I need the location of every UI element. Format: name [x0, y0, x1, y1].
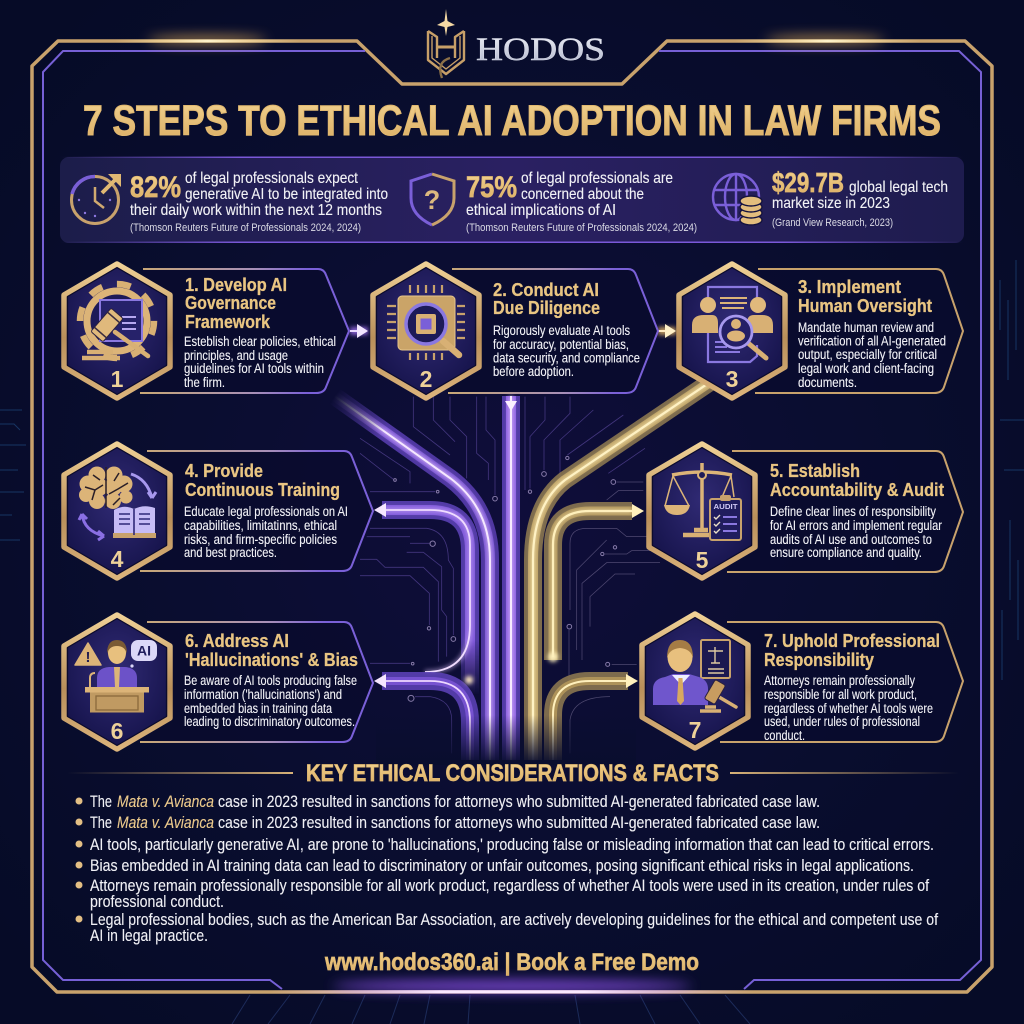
thin circuit traces: [360, 397, 660, 753]
description: capabilities, limitatinns, ethical: [184, 518, 337, 533]
icon badge: gear, document and gavel: [64, 264, 170, 398]
heading: 2. Conduct AI: [493, 279, 599, 300]
stat: 75%: concerned about the: [521, 186, 644, 203]
description: [770, 504, 942, 560]
description: before adoption.: [493, 364, 574, 379]
stat: $29.7B: market size in 2023: [772, 195, 890, 212]
description: [184, 334, 336, 390]
arrow: to step 7: [626, 674, 638, 688]
wordmark: HODOS: [476, 32, 605, 68]
key facts list: professional conduct.: [90, 892, 224, 911]
heading: 5. Establish: [770, 460, 860, 481]
stat: $29.7B: $29.7B: [772, 167, 844, 198]
stat: 75%: [466, 170, 697, 234]
icon: globe with coins: [713, 174, 762, 225]
icon badge: brain and book: 4: [111, 546, 124, 572]
logo crest: [428, 31, 464, 78]
description: used, under rules of professional: [764, 714, 920, 729]
logo star: [437, 9, 455, 36]
description: Esteblish clear policies, ethical: [184, 334, 336, 349]
heading: 1. Develop AI: [185, 274, 287, 295]
description: conduct.: [764, 728, 805, 743]
panel: step 5: [649, 444, 963, 578]
icon badge: speaker at podium: [64, 615, 170, 749]
description: Attorneys remain professionally: [764, 673, 915, 688]
icon: shield with question mark: ?: [424, 185, 440, 215]
panel: step 2: [373, 264, 658, 398]
panel outline: [140, 451, 373, 571]
stat: 75%: ethical implications of AI: [466, 202, 616, 219]
panel: statistics: [60, 156, 964, 243]
heading: [798, 276, 932, 316]
description: documents.: [798, 375, 857, 390]
arrow: step 1 to step 2: [350, 324, 368, 338]
description: for accuracy, potential bias,: [493, 337, 629, 352]
panel outline: [140, 269, 349, 393]
icon badge: brain and book: [64, 444, 170, 578]
description: Define clear lines of responsibility: [770, 504, 936, 519]
heading: [185, 274, 287, 332]
stat: $29.7B: [772, 167, 948, 229]
section heading: key considerations: KEY ETHICAL CONSIDERATIONS & FACTS: [306, 760, 719, 787]
icon: clock with arrow: [72, 174, 121, 224]
description: [764, 673, 933, 743]
key facts list: [76, 792, 938, 945]
description: Rigorously evaluate AI tools: [493, 323, 630, 338]
panel outline: [140, 622, 373, 742]
central circuit network: [333, 374, 722, 760]
description: [184, 504, 348, 560]
central vertical route from step 2: [505, 396, 517, 760]
description: data security, and compliance: [493, 350, 640, 366]
stat: 75%: of legal professionals are: [521, 170, 673, 187]
heading: [185, 460, 340, 500]
panel: step 4: [64, 444, 373, 578]
arrow: to step 4: [374, 503, 386, 517]
panel: step 7: [642, 614, 963, 748]
panel: step 3: [679, 264, 963, 398]
heading: [185, 630, 358, 670]
side data decoration: [0, 260, 1024, 680]
icon: shield with question mark: [411, 174, 454, 225]
icon badge: scales and audit clipboard: AUDIT: [714, 502, 738, 511]
stat: 82%: generative AI to be integrated into: [185, 186, 388, 203]
top right glow: [735, 36, 920, 44]
description: Mandate human review and: [798, 320, 934, 335]
call to action: www.hodos360.ai | Book a Free Demo: [324, 949, 699, 976]
heading: 4. Provide: [185, 460, 263, 481]
icon badge: scales and audit clipboard: [649, 444, 755, 578]
stat: $29.7B: global legal tech: [849, 179, 948, 196]
icon badge: gear, document and gavel: 1: [111, 366, 124, 392]
icon badge: speaker at podium: AI: [137, 642, 151, 658]
stat: 82%: 82%: [130, 171, 181, 204]
description: legal work and client-facing: [798, 361, 934, 376]
description: risks, and firm-specific policies: [184, 532, 337, 547]
description: ensure compliance and quality.: [770, 545, 922, 560]
description: Be aware of AI tools producing false: [184, 673, 357, 688]
heading: 'Hallucinations' & Bias: [185, 649, 358, 670]
panel outline: [727, 451, 963, 572]
key facts list: case in 2023 resulted in sanctions for attorneys who submitted AI-generated fabricated case law.: [218, 792, 820, 811]
description: [798, 320, 946, 390]
arrow: to step 5: [632, 504, 644, 518]
description: verification of all AI-generated: [798, 334, 946, 348]
glow: route end: [548, 652, 558, 662]
stat: 82%: [130, 170, 388, 234]
heading: Governance: [185, 292, 276, 313]
arrow: step 2 to step 3: [658, 324, 676, 338]
description: guidelines for AI tools within: [184, 361, 324, 376]
gold route to step 7: [553, 674, 638, 760]
heading: Continuous Training: [185, 479, 340, 500]
icon badge: attorney, law book and gavel: 7: [689, 717, 701, 743]
key facts list: The: [90, 792, 112, 811]
glow: route 4 end dot: [465, 676, 473, 684]
purple route to step 4: [374, 503, 470, 700]
description: audits of AI use and outcomes to: [770, 532, 932, 547]
icon badge: attorney, law book and gavel: [642, 614, 748, 748]
logo: [428, 9, 605, 78]
icon badge: scales and audit clipboard: 5: [696, 547, 709, 573]
panel outline: [755, 269, 963, 393]
stat: 75%: (Thomson Reuters Future of Professionals 2024, 2024): [466, 222, 697, 234]
stat: 82%: of legal professionals expect: [185, 170, 358, 187]
key facts list: AI in legal practice.: [90, 926, 208, 945]
icon badge: speaker at podium: 6: [111, 718, 123, 744]
stat: $29.7B: (Grand View Research, 2023): [772, 217, 893, 229]
panel: step 1: [64, 264, 349, 398]
description: Educate legal professionals on AI: [184, 504, 348, 519]
panel outline: [448, 269, 658, 393]
heading: Responsibility: [764, 649, 875, 670]
description: for AI errors and implement regular: [770, 518, 942, 533]
key facts list: Mata v. Avianca: [117, 813, 214, 832]
heading: [764, 630, 940, 670]
panel outline: [720, 622, 963, 742]
description: responsible for all work product,: [764, 687, 917, 702]
description: regardless of whether AI tools were: [764, 701, 933, 716]
top left glow: [115, 36, 300, 44]
heading: 3. Implement: [798, 276, 901, 297]
heading: 7. Uphold Professional: [764, 630, 940, 651]
key facts list: case in 2023 resulted in sanctions for attorneys who submitted AI-generated fabricated case law.: [218, 813, 820, 832]
heading: Human Oversight: [798, 295, 932, 316]
description: output, especially for critical: [798, 347, 937, 362]
stat: 82%: (Thomson Reuters Future of Professionals 2024, 2024): [130, 222, 361, 234]
description: embedded bias in training data: [184, 701, 332, 716]
description: and best practices.: [184, 545, 277, 560]
icon badge: chip and magnifier: [373, 264, 479, 398]
stat: 75%: 75%: [466, 171, 517, 204]
heading: Due Diligence: [493, 297, 600, 318]
icon badge: chip and magnifier: 2: [420, 366, 432, 392]
purple route to step 6: [374, 674, 470, 760]
icon badge: speaker at podium: !: [86, 649, 90, 666]
description: the firm.: [184, 375, 225, 390]
heading: Accountability & Audit: [770, 479, 944, 500]
panel: step 6: [64, 615, 373, 749]
gold route from step 3: [533, 374, 722, 760]
description: [493, 323, 640, 379]
heading: [493, 279, 600, 318]
fade of routes into lower section: [376, 715, 636, 765]
description: leading to discriminatory outcomes.: [184, 714, 355, 729]
key facts list: Mata v. Avianca: [117, 792, 214, 811]
heading: Framework: [185, 311, 271, 332]
description: principles, and usage: [184, 348, 288, 363]
heading: [770, 460, 944, 500]
bottom perspective grid: [232, 995, 750, 1024]
key facts list: The: [90, 813, 112, 832]
arrow: to step 6: [374, 674, 386, 688]
stat: 82%: their daily work within the next 12 months: [130, 202, 382, 219]
icon badge: reviewers and document: 3: [726, 366, 738, 392]
arrow: down to centre: [505, 401, 517, 411]
icon badge: reviewers and document: [679, 264, 785, 398]
gold route to step 5: [548, 504, 644, 662]
purple route from step 1: [333, 395, 490, 760]
heading: 6. Address AI: [185, 630, 289, 651]
description: [184, 673, 357, 729]
bottom centre glow: [270, 980, 754, 993]
description: information ('hallucinations') and: [184, 687, 342, 702]
